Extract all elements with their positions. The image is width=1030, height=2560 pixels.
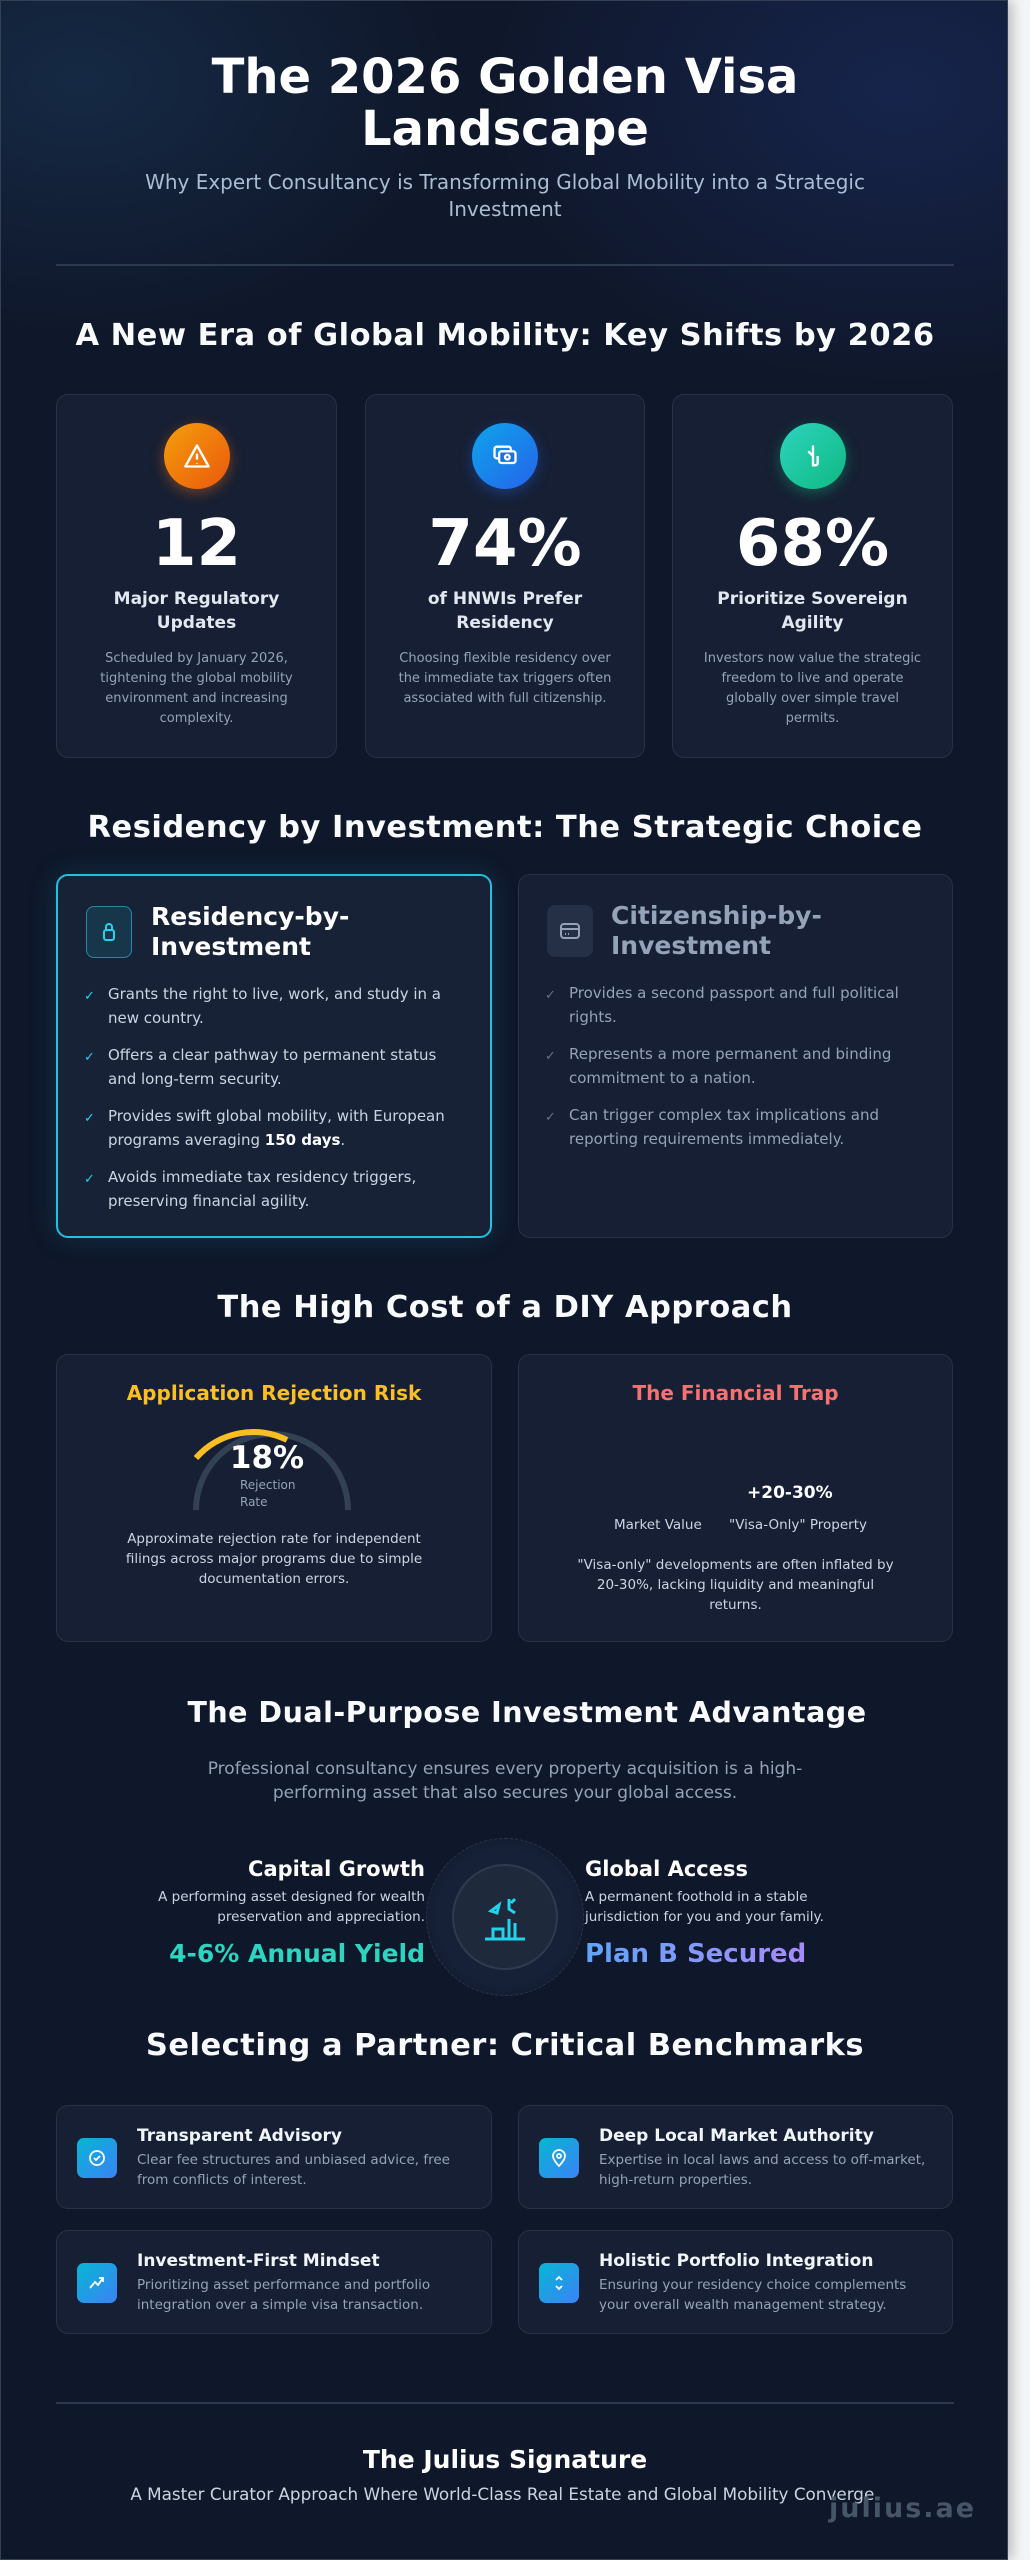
panel: citizenship	[518, 874, 953, 1238]
heading: dual purpose: The Dual-Purpose Investment Advantage	[187, 1696, 867, 1729]
gauge chart: Rejection	[240, 1478, 295, 1492]
list: Grants the right to live, work, and study in a new country.	[108, 985, 441, 1027]
chart labels	[614, 1483, 867, 1533]
icon: money	[472, 423, 538, 489]
panel title: Citizenship-by-	[611, 901, 822, 930]
list: ✓	[84, 1172, 95, 1187]
panel title: Investment	[611, 931, 771, 960]
benchmark: local	[518, 2105, 953, 2209]
panel title: Investment	[151, 932, 311, 961]
panel: residency	[56, 874, 492, 1238]
panel: rejection risk: Application Rejection Risk	[127, 1381, 421, 1405]
card: 68%: Prioritize Sovereign	[717, 589, 908, 609]
title: Landscape	[361, 101, 649, 157]
list: ✓	[545, 1110, 556, 1125]
icon: agility	[780, 423, 846, 489]
benchmark: investment-first: Prioritizing asset performance and portfolio integration over a simple visa transaction.	[137, 2277, 430, 2313]
footer tagline: A Master Curator Approach Where World-Class Real Estate and Global Mobility Converge.	[130, 2484, 880, 2504]
list: Avoids immediate tax residency triggers, preserving financial agility.	[108, 1168, 416, 1210]
panel title	[611, 901, 822, 960]
benchmark: holistic: Holistic Portfolio Integration	[599, 2251, 873, 2271]
benchmark: transparent: Clear fee structures and unbiased advice, free from conflicts of interest.	[137, 2152, 450, 2188]
panel: rejection risk	[56, 1354, 492, 1642]
list: Provides a second passport and full political rights.	[569, 984, 899, 1026]
global access: Global Access	[585, 1857, 748, 1881]
subtitle: Why Expert Consultancy is Transforming Global Mobility into a Strategic Investment	[145, 170, 865, 221]
capital growth: Capital Growth	[248, 1857, 425, 1881]
icon: card	[547, 905, 593, 957]
list: ✓	[84, 1111, 95, 1126]
list: Offers a clear pathway to permanent status and long-term security.	[108, 1046, 436, 1088]
benchmark: investment-first: Investment-First Mindset	[137, 2251, 380, 2271]
list	[545, 984, 899, 1148]
card: 68%: Agility	[781, 613, 844, 633]
global access: A permanent foothold in a stable jurisdiction for you and your family.	[585, 1889, 824, 1925]
heading: strategic choice: Residency by Investment: The Strategic Choice	[88, 810, 922, 845]
panel title	[151, 902, 349, 961]
list: Represents a more permanent and binding commitment to a nation.	[569, 1045, 891, 1087]
list: ✓	[84, 989, 95, 1004]
icon: lock	[86, 906, 132, 958]
benchmark: transparent: Transparent Advisory	[137, 2126, 342, 2146]
card: 12 updates: Major Regulatory	[114, 589, 279, 609]
watermark: julius.ae	[829, 2493, 976, 2524]
panel: rejection risk: Approximate rejection rate for independent filings across major programs due to simple documentation errors.	[126, 1531, 422, 1587]
global access	[584, 1857, 824, 1969]
card: 68%: 68%	[736, 507, 889, 581]
heading: key shifts: A New Era of Global Mobility: Key Shifts by 2026	[75, 318, 935, 353]
card: 74%: Residency	[456, 613, 554, 633]
card: 12 updates: Scheduled by January 2026, tightening the global mobility environment and increasing complexity.	[100, 651, 293, 726]
list: ✓	[545, 988, 556, 1003]
panel title: Residency-by-	[151, 902, 349, 931]
gauge chart: 18%	[230, 1440, 304, 1476]
title: The 2026 Golden Visa	[212, 49, 798, 105]
panel: financial trap	[518, 1354, 953, 1642]
benchmark: holistic	[518, 2230, 953, 2334]
heading: DIY: The High Cost of a DIY Approach	[217, 1290, 793, 1325]
list	[84, 985, 445, 1210]
capital growth: A performing asset designed for wealth preservation and appreciation.	[158, 1889, 425, 1925]
list: ✓	[84, 1050, 95, 1065]
chart labels: +20-30%	[747, 1483, 833, 1503]
list: Can trigger complex tax implications and reporting requirements immediately.	[569, 1106, 879, 1148]
footer title: The Julius Signature	[363, 2445, 647, 2474]
card: 12 updates: Updates	[157, 613, 236, 633]
chart labels: Market Value	[614, 1517, 702, 1533]
global access: Plan B Secured	[585, 1939, 806, 1969]
card: 68%	[672, 394, 953, 758]
panel: financial trap: The Financial Trap	[632, 1381, 839, 1405]
card: 74%: Choosing flexible residency over the immediate tax triggers often associated with full citizenship.	[399, 651, 611, 706]
list: ✓	[545, 1049, 556, 1064]
subtext: Professional consultancy ensures every property acquisition is a high-performing asset that also secures your global access.	[208, 1759, 802, 1803]
title	[212, 49, 798, 157]
card: 74%: 74%	[428, 507, 582, 581]
icon: warning	[164, 423, 230, 489]
card: 68%: Investors now value the strategic freedom to live and operate globally over simple travel permits.	[704, 651, 921, 726]
card: 12 updates	[56, 394, 337, 758]
center icon	[426, 1838, 584, 1996]
benchmark: local: Deep Local Market Authority	[599, 2126, 874, 2146]
gauge chart	[193, 1429, 351, 1510]
list: Provides swift global mobility, with European programs averaging 150 days.	[108, 1107, 445, 1149]
benchmark: investment-first	[56, 2230, 492, 2334]
benchmark: local: Expertise in local laws and access to off-market, high-return properties.	[599, 2152, 925, 2188]
card: 74%: of HNWIs Prefer	[428, 589, 582, 609]
heading: benchmarks: Selecting a Partner: Critical Benchmarks	[146, 2028, 864, 2063]
chart labels: "Visa-Only" Property	[729, 1517, 867, 1533]
capital growth: 4-6% Annual Yield	[169, 1939, 425, 1968]
card: 12 updates: 12	[152, 507, 241, 581]
card: 74%	[365, 394, 645, 758]
gauge chart: Rate	[240, 1495, 268, 1509]
capital growth	[158, 1857, 425, 1968]
panel: financial trap: "Visa-only" developments are often inflated by 20-30%, lacking liquidity and meaningful returns.	[577, 1557, 894, 1613]
benchmark: holistic: Ensuring your residency choice complements your overall wealth management strategy.	[599, 2277, 906, 2313]
benchmark: transparent	[56, 2105, 492, 2209]
